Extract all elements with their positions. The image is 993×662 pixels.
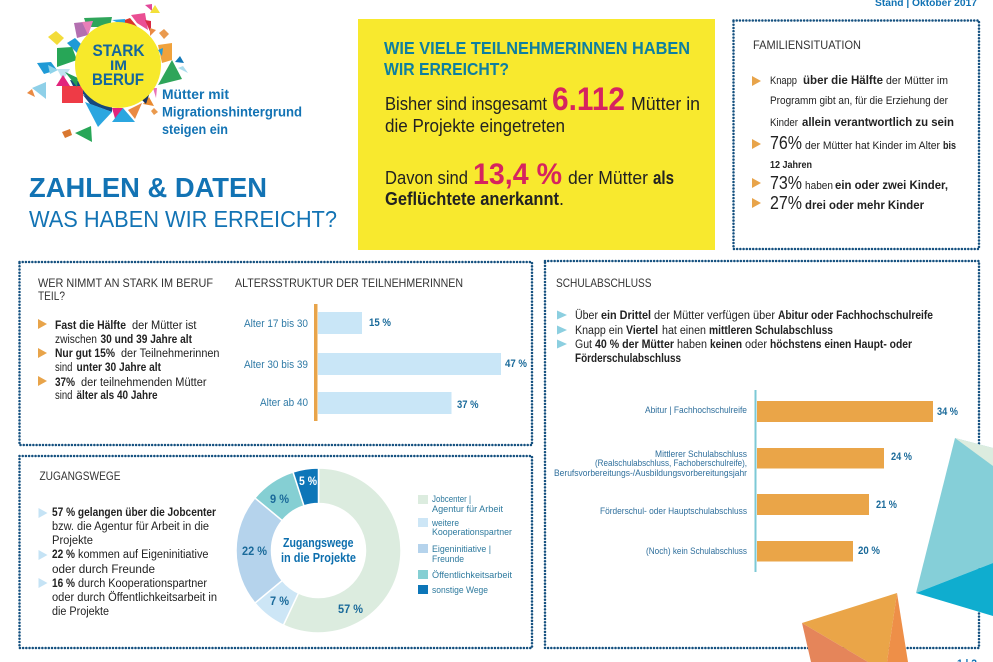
logo yellow circle bbox=[75, 22, 161, 108]
panel: Familiensituation bbox=[734, 20, 979, 249]
donut legend: Agentur für Arbeit bbox=[432, 504, 503, 515]
bar chart: Schulabschluss: 34 % bbox=[937, 406, 958, 418]
bullet list: Förderschulabschluss bbox=[575, 353, 681, 365]
bullet list: allein verantwortlich zu sein bbox=[802, 117, 954, 129]
bullet list: Viertel bbox=[626, 325, 658, 337]
title: ZAHLEN & DATEN bbox=[29, 172, 267, 203]
bullet list: haben bbox=[677, 339, 707, 351]
yellow panel heading bbox=[384, 38, 690, 79]
bullet list: bis bbox=[943, 140, 956, 152]
bullet list: der Teilnehmerinnen bbox=[121, 348, 220, 360]
bullet list: Programm gibt an, für die Erziehung der bbox=[770, 95, 948, 107]
donut legend: Jobcenter | bbox=[432, 494, 471, 505]
panel frame bbox=[20, 262, 532, 445]
bullet list: Nur gut 15% bbox=[55, 348, 115, 360]
logo tagline: Mütter mit bbox=[162, 86, 229, 102]
bar chart: Schulabschluss: Mittlerer Schulabschluss bbox=[655, 449, 747, 460]
bullet list: Knapp ein bbox=[575, 325, 623, 337]
bullet list: ein oder zwei Kinder, bbox=[835, 180, 948, 192]
bullet list: 30 und 39 Jahre alt bbox=[100, 334, 192, 346]
yellow panel heading: WIR ERREICHT? bbox=[384, 59, 509, 79]
panel: yellow key figures bbox=[358, 19, 715, 250]
bullet list: sind bbox=[55, 362, 72, 374]
panel heading: TEIL? bbox=[38, 289, 65, 303]
bar chart: Schulabschluss: Berufsvorbereitungs-/Ausbildungsvorbereitungsjahr bbox=[554, 468, 747, 479]
key figure: refugees: als bbox=[653, 168, 674, 188]
bullet list: 12 Jahren bbox=[770, 160, 812, 171]
bullet list: unter 30 Jahre alt bbox=[76, 362, 161, 374]
donut centre label: in die Projekte bbox=[281, 551, 356, 565]
bar chart: Schulabschluss bbox=[554, 390, 958, 572]
bullet list: höchstens einen Haupt- oder bbox=[770, 339, 912, 351]
bullet list: kommen auf Eigeninitiative bbox=[78, 549, 208, 561]
bullet list: 76% bbox=[770, 133, 802, 153]
bullet list: 57 % gelangen über die Jobcenter bbox=[52, 507, 216, 519]
key figure: participants bbox=[385, 81, 700, 136]
logo tagline: steigen ein bbox=[162, 121, 228, 137]
bar chart: Altersstruktur bbox=[235, 276, 527, 421]
title bbox=[29, 172, 337, 232]
panel heading: SCHULABSCHLUSS bbox=[556, 276, 652, 290]
bar chart: Altersstruktur: 37 % bbox=[457, 399, 479, 411]
donut values: 57 % bbox=[338, 602, 363, 616]
bullet list bbox=[38, 507, 217, 618]
bullet list: bzw. die Agentur für Arbeit in die bbox=[52, 521, 209, 533]
bullet list: der Mütter ist bbox=[132, 320, 197, 332]
bullet list: oder bbox=[745, 339, 767, 351]
bullet list: Projekte bbox=[52, 535, 93, 547]
bullet list: mittleren Schulabschluss bbox=[709, 325, 833, 337]
key figure: participants: Bisher sind insgesamt bbox=[385, 93, 547, 114]
panel frame bbox=[20, 456, 532, 648]
key figure: refugees bbox=[385, 158, 674, 209]
bullet list: haben bbox=[805, 180, 833, 192]
bullet list: oder durch Freunde bbox=[52, 564, 155, 576]
key figure: participants: 6.112 bbox=[552, 81, 625, 117]
bar chart: Altersstruktur: 15 % bbox=[369, 317, 391, 329]
donut legend bbox=[418, 494, 512, 596]
bullet list: Fast die Hälfte bbox=[55, 320, 126, 332]
donut legend: weitere bbox=[431, 518, 459, 529]
bullet list: Knapp bbox=[770, 75, 797, 87]
yellow panel heading: WIE VIELE TEILNEHMERINNEN HABEN bbox=[384, 38, 690, 58]
donut values bbox=[242, 474, 363, 616]
logo wordmark: STARK bbox=[92, 41, 145, 60]
bar chart: Schulabschluss: Abitur | Fachhochschulreife bbox=[645, 405, 747, 416]
panel heading: ZUGANGSWEGE bbox=[40, 469, 120, 483]
logo: Stark im Beruf bbox=[27, 4, 188, 142]
panel heading: FAMILIENSITUATION bbox=[753, 38, 861, 52]
key figure: refugees: Geflüchtete anerkannt bbox=[385, 189, 559, 209]
logo wordmark: IM bbox=[110, 57, 127, 73]
bullet list: der Mütter verfügen über bbox=[654, 310, 775, 322]
donut legend: Öffentlichkeitsarbeit bbox=[432, 570, 512, 581]
logo tagline: Migrationshintergrund bbox=[162, 104, 302, 120]
bullet list: die Projekte bbox=[52, 606, 109, 618]
bullet list: zwischen bbox=[55, 334, 97, 346]
bar chart: Schulabschluss: 24 % bbox=[891, 451, 912, 463]
bullet list: älter als 40 Jahre bbox=[76, 390, 158, 402]
bar chart: Altersstruktur: Alter 30 bis 39 bbox=[244, 359, 308, 371]
bullet list: 37% bbox=[55, 377, 75, 389]
donut legend: sonstige Wege bbox=[432, 585, 488, 596]
panel: Wer nimmt teil / Altersstruktur bbox=[20, 262, 532, 445]
bullet list: sind bbox=[55, 390, 72, 402]
bullet list: drei oder mehr Kinder bbox=[805, 200, 925, 212]
key figure: refugees: der Mütter bbox=[568, 167, 648, 188]
panel heading bbox=[38, 276, 213, 303]
logo wordmark bbox=[92, 41, 145, 89]
bullet list bbox=[38, 319, 220, 402]
bullet list: 73% bbox=[770, 173, 802, 193]
bar chart: Schulabschluss: 20 % bbox=[858, 545, 880, 557]
decoration: orange polyhedron bbox=[802, 593, 908, 662]
chart heading: ALTERSSTRUKTUR DER TEILNEHMERINNEN bbox=[235, 276, 463, 290]
bullet list: 27% bbox=[770, 193, 802, 213]
bullet list: Über bbox=[575, 310, 598, 322]
title: WAS HABEN WIR ERREICHT? bbox=[29, 206, 337, 232]
donut centre label: Zugangswege bbox=[283, 536, 354, 550]
bar chart: Schulabschluss: 21 % bbox=[876, 499, 897, 511]
bullet list: über die Hälfte bbox=[803, 75, 883, 87]
bullet list: Gut bbox=[575, 339, 593, 351]
bullet list: Kinder bbox=[770, 117, 798, 129]
bullet list: durch Kooperationspartner bbox=[78, 578, 207, 590]
logo tagline bbox=[162, 86, 302, 137]
yellow panel background bbox=[358, 19, 715, 250]
bar chart: Altersstruktur: Alter ab 40 bbox=[260, 397, 308, 409]
key figure: participants: die Projekte eingetreten bbox=[385, 115, 565, 136]
bullet list: oder durch Öffentlichkeitsarbeit in bbox=[52, 592, 217, 604]
bar chart: Altersstruktur: Alter 17 bis 30 bbox=[244, 318, 308, 330]
donut legend: Eigeninitiative | bbox=[432, 544, 491, 555]
bar chart: Schulabschluss: (Noch) kein Schulabschluss bbox=[646, 546, 747, 557]
key figure: participants: Mütter in bbox=[631, 93, 700, 114]
key figure: refugees: 13,4 % bbox=[473, 158, 562, 191]
bullet list: der teilnehmenden Mütter bbox=[81, 377, 207, 389]
panel frame bbox=[545, 261, 979, 648]
decoration: teal polyhedron bbox=[916, 438, 993, 616]
panel frame bbox=[734, 20, 979, 249]
bullet list: der Mütter im bbox=[886, 75, 948, 87]
donut centre label bbox=[281, 536, 356, 565]
bullet list: 16 % bbox=[52, 578, 75, 590]
donut legend: Kooperationspartner bbox=[432, 527, 512, 538]
donut values: 9 % bbox=[270, 492, 289, 506]
bullet list: keinen bbox=[710, 339, 742, 351]
bullet list bbox=[752, 75, 956, 213]
bullet list: Abitur oder Fachhochschulreife bbox=[778, 310, 933, 322]
bullet list: der Mütter hat Kinder im Alter bbox=[805, 140, 940, 152]
panel: Zugangswege bbox=[20, 456, 532, 648]
donut values: 5 % bbox=[299, 474, 317, 488]
donut legend: Freunde bbox=[432, 554, 464, 565]
bullet list: 22 % bbox=[52, 549, 75, 561]
panel heading: WER NIMMT AN STARK IM BERUF bbox=[38, 276, 213, 290]
key figure: refugees: . bbox=[559, 189, 564, 209]
logo confetti shapes bbox=[27, 4, 188, 142]
bar chart: Altersstruktur: 47 % bbox=[505, 358, 527, 370]
bullet list: 40 % der Mütter bbox=[595, 339, 674, 351]
panel: Schulabschluss bbox=[545, 261, 979, 648]
bullet list: ein Drittel bbox=[601, 310, 651, 322]
bullet list bbox=[557, 310, 933, 365]
key figure: refugees: Davon sind bbox=[385, 167, 468, 188]
bar chart: Schulabschluss: Förderschul- oder Hauptschulabschluss bbox=[600, 506, 747, 517]
donut chart bbox=[236, 468, 401, 633]
bullet list: hat einen bbox=[662, 325, 706, 337]
bar chart: Schulabschluss: (Realschulabschluss, Fachoberschulreife), bbox=[595, 458, 747, 469]
donut values: 22 % bbox=[242, 544, 267, 558]
donut values: 7 % bbox=[270, 594, 289, 608]
logo wordmark: BERUF bbox=[92, 70, 144, 89]
